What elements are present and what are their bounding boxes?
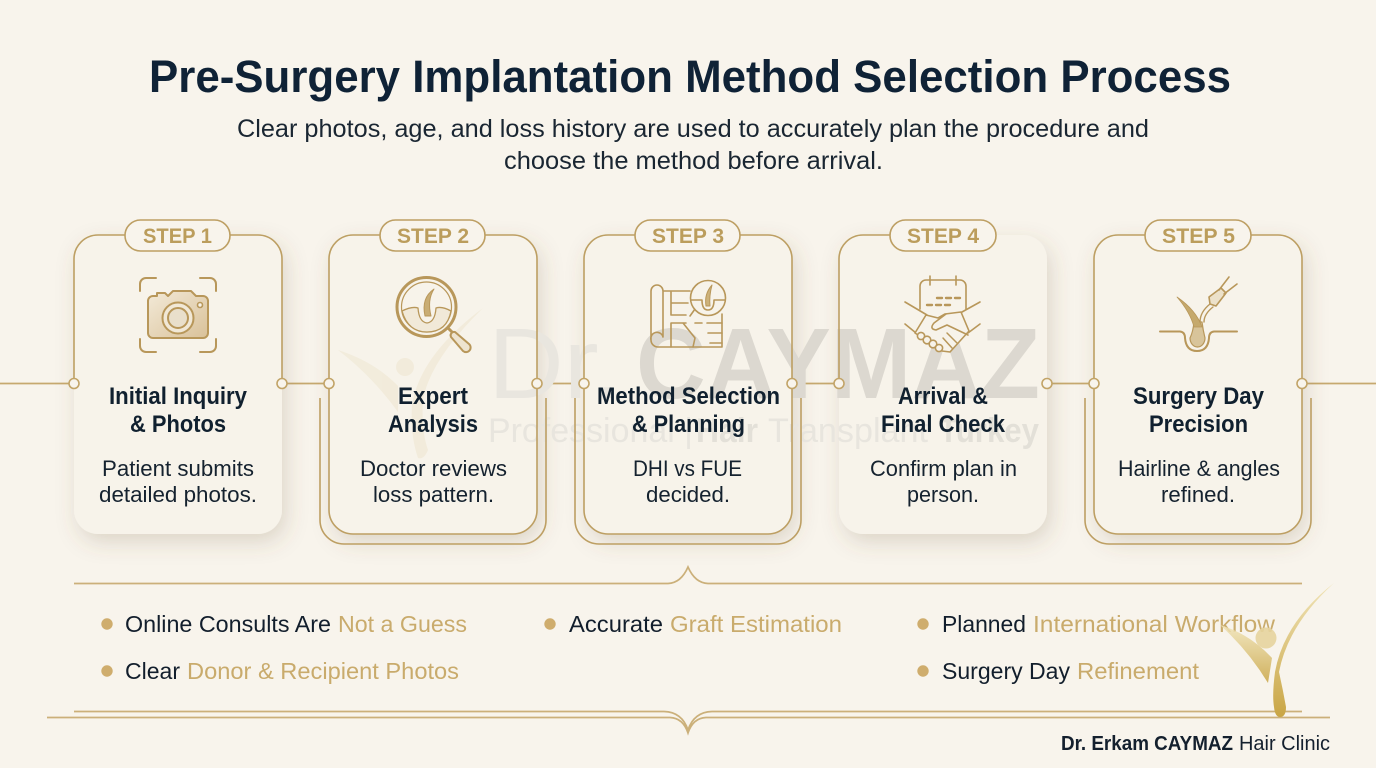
step 1 description [99,456,257,507]
step 2 description: loss pattern. [373,482,494,507]
step 4 heading [881,383,1006,438]
key points list [101,611,1276,684]
watermark: faded logo [338,308,483,458]
step 2 description [360,456,507,507]
bullet: online consults: Not a Guess [338,611,467,637]
icon: blueprint plan [651,280,726,347]
panel: step 2 [360,220,507,507]
step 3 badge: STEP 3 [652,225,724,248]
step 2 badge [380,220,485,251]
step 1 description: Patient submits [102,456,254,481]
step 5 heading: Precision [1149,411,1248,438]
subtitle [237,115,1149,175]
step 4 heading: Final Check [881,411,1006,438]
step 4 heading: Arrival & [898,383,988,410]
icon: magnifier over follicle [397,278,471,352]
step 3 description [633,456,742,507]
step 4 description: Confirm plan in [870,456,1017,481]
icon: follicle and implanter [1160,277,1237,351]
step 5 description [1118,456,1280,507]
card borders [74,235,1311,544]
panel: step 4 [870,220,1017,507]
step 1 description: detailed photos. [99,482,257,507]
bullet: online consults: Online Consults Are [125,611,331,637]
bullet: international workflow: International Workflow [1033,611,1276,637]
step 3 heading [597,383,780,438]
subtitle: Clear photos, age, and loss history are used to accurately plan the procedure and [237,115,1149,143]
step 3 heading: & Planning [632,411,745,438]
step 5 description: Hairline & angles [1118,456,1280,481]
watermark: Dr. CAYMAZ [488,308,1040,450]
watermark: Dr. CAYMAZ: CAYMAZ [636,308,1040,420]
step 3 description: DHI vs FUE [633,456,742,481]
bullet: graft estimation: Graft Estimation [670,611,842,637]
icon: camera [140,278,216,352]
watermark: Dr. CAYMAZ: Turkey [939,412,1039,450]
step 5 heading: Surgery Day [1133,383,1265,410]
step 2 heading: Expert [398,383,468,410]
bullet: surgery refinement: Surgery Day [942,658,1070,684]
bullet: clear photos: Clear [125,658,180,684]
panel: step 3 [597,220,780,507]
step 3 heading: Method Selection [597,383,780,410]
panel: step 5 [1118,220,1280,507]
icon: calendar and handshake [905,276,980,352]
step 1 badge: STEP 1 [143,225,212,248]
step 4 badge: STEP 4 [907,225,979,248]
step 2 heading: Analysis [388,411,478,438]
step 2 badge: STEP 2 [397,225,469,248]
step 3 description: decided. [646,482,730,507]
step 4 description [870,456,1017,507]
bullet: international workflow: Planned [942,611,1026,637]
step 4 badge [890,220,996,251]
step 2 heading [388,383,478,438]
step 4 description: person. [907,482,979,507]
step 5 badge: STEP 5 [1162,225,1235,248]
step 5 badge [1145,220,1251,251]
bullet: graft estimation: Accurate [569,611,663,637]
step 1 heading: & Photos [130,411,226,438]
timeline connector [0,382,1376,384]
panel: step 1 [99,220,257,507]
bullet: surgery refinement [917,658,1199,684]
step 5 description: refined. [1161,482,1235,507]
watermark: Dr. CAYMAZ: Professional | [488,412,693,450]
bullet: international workflow [917,611,1276,637]
card backgrounds [74,235,1302,534]
watermark: Dr. CAYMAZ: Transplant [768,412,929,450]
footer: clinic name [1061,733,1330,755]
step 1 heading [109,383,248,438]
subtitle: choose the method before arrival. [504,147,883,175]
step 3 badge [635,220,740,251]
step 1 heading: Initial Inquiry [109,383,248,410]
step 5 heading [1133,383,1265,438]
watermark: Dr. CAYMAZ: Dr. [488,308,622,420]
footer: clinic name: Hair Clinic [1239,733,1330,755]
timeline nodes [69,378,1307,388]
bullet: clear photos: Donor & Recipient Photos [187,658,459,684]
bullet: graft estimation [544,611,842,637]
watermark: Dr. CAYMAZ: Hair [696,412,758,450]
bullet: online consults [101,611,467,637]
footer: clinic name: Dr. Erkam CAYMAZ [1061,733,1233,755]
title: Pre-Surgery Implantation Method Selection Process [149,51,1231,102]
bullet: surgery refinement: Refinement [1077,658,1199,684]
logo: gold figure [1220,583,1334,717]
step 1 badge [125,220,230,251]
step 2 description: Doctor reviews [360,456,507,481]
